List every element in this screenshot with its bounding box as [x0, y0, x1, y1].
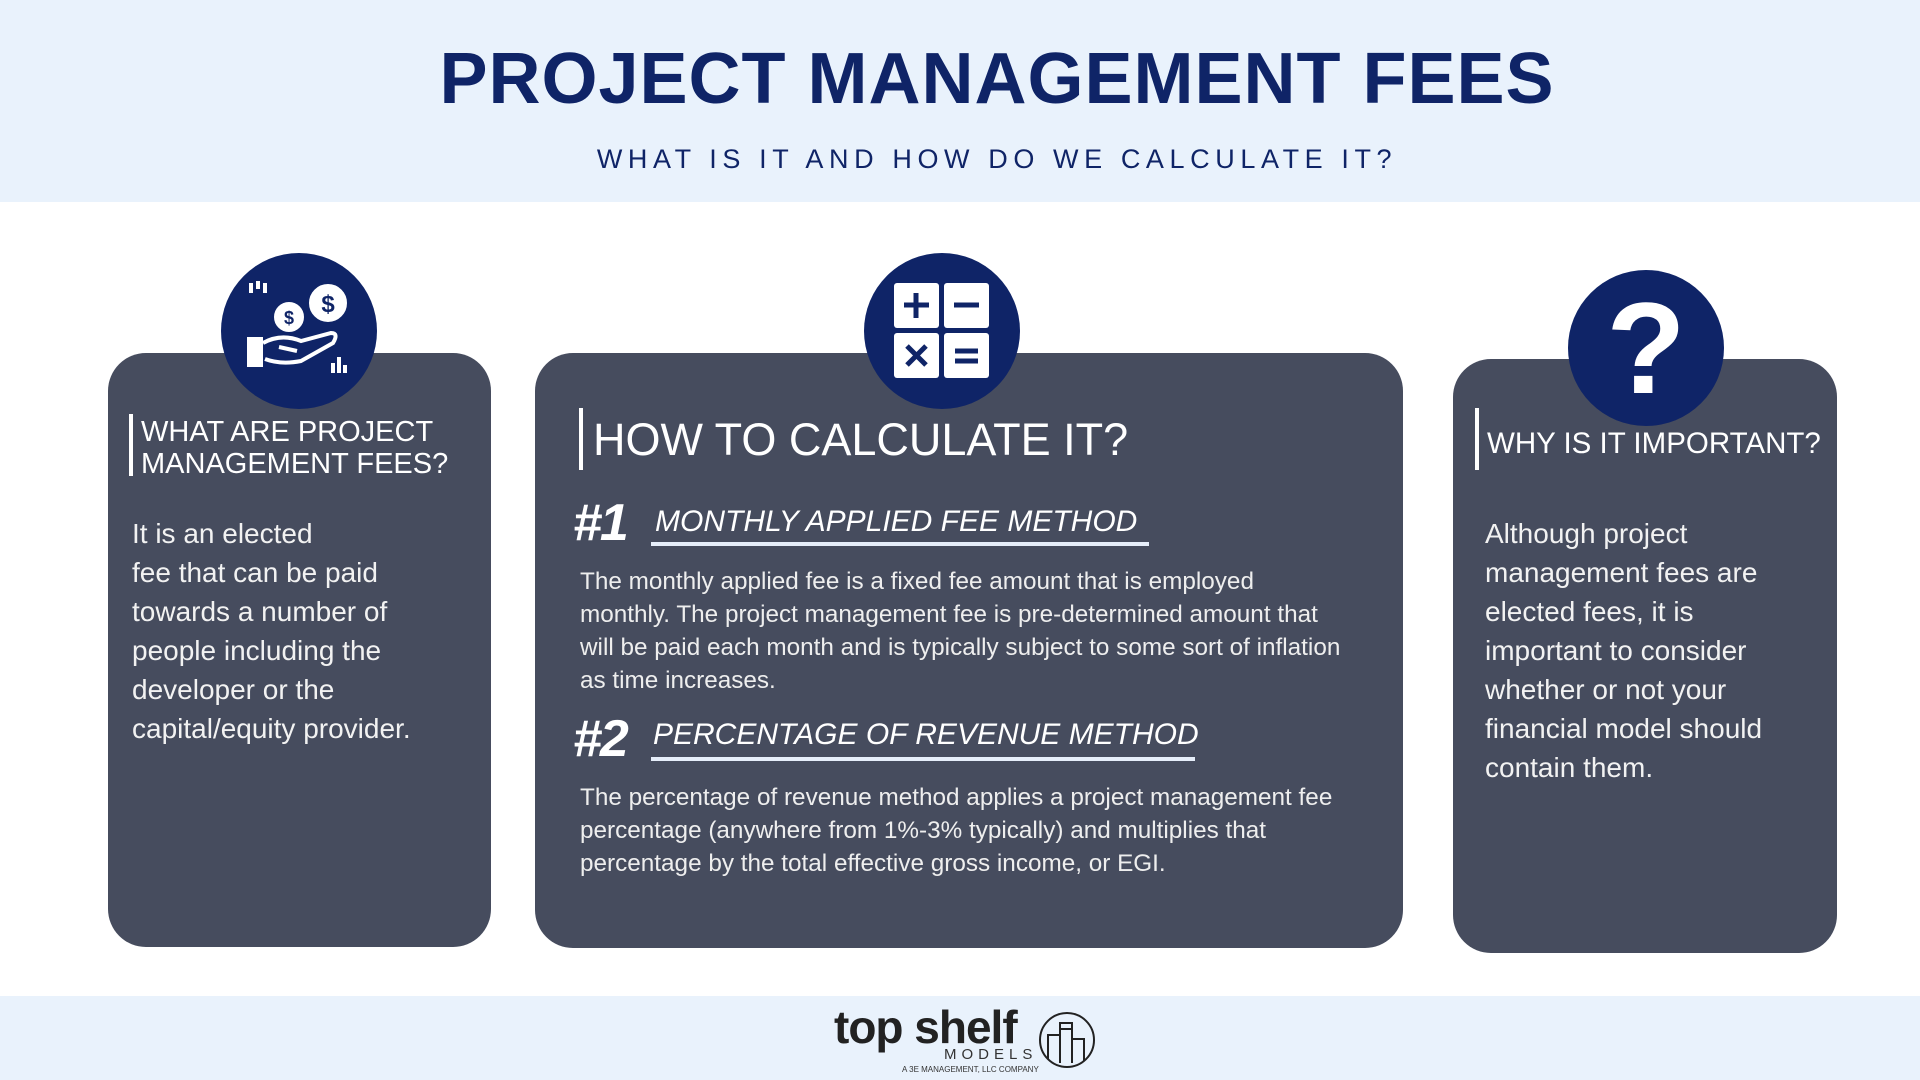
body text: developer or the [132, 674, 334, 705]
method 2 [573, 710, 1332, 877]
icon: calculator [864, 253, 1020, 409]
icon: question mark [1568, 270, 1724, 426]
method 1: as time increases. [580, 667, 776, 694]
subtitle: WHAT IS IT AND HOW DO WE CALCULATE IT? [597, 144, 1397, 174]
heading [1475, 408, 1821, 470]
panel: what are fees [108, 353, 491, 947]
panel: why important [1453, 359, 1837, 953]
heading: HOW TO CALCULATE IT? [593, 414, 1128, 465]
method 1: monthly. The project management fee is pre-determined amount that [580, 601, 1318, 628]
method 2: #2 [573, 710, 627, 768]
heading: WHAT ARE PROJECT [141, 416, 433, 448]
logo [834, 1001, 1095, 1074]
footer band [0, 996, 1920, 1080]
method 1: MONTHLY APPLIED FEE METHOD [655, 505, 1137, 538]
method 2: The percentage of revenue method applies a project management fee [580, 784, 1332, 811]
body text: management fees are [1485, 557, 1757, 588]
body text: whether or not your [1485, 674, 1726, 705]
body text [1485, 518, 1762, 783]
body text: fee that can be paid [132, 557, 378, 588]
icon: money hand: $ [284, 308, 294, 328]
body text: towards a number of [132, 596, 387, 627]
icon: question mark: ? [1606, 275, 1686, 421]
panel: how to calculate [535, 353, 1403, 948]
method 1: The monthly applied fee is a fixed fee amount that is employed [580, 568, 1254, 595]
method 2: PERCENTAGE OF REVENUE METHOD [653, 718, 1199, 751]
header band [0, 0, 1920, 202]
heading: WHY IS IT IMPORTANT? [1487, 427, 1821, 460]
body text: capital/equity provider. [132, 713, 411, 744]
logo: A 3E MANAGEMENT, LLC COMPANY [902, 1065, 1039, 1074]
body text: financial model should [1485, 713, 1762, 744]
body text: people including the [132, 635, 381, 666]
logo: top shelf [834, 1001, 1017, 1053]
method 1: #1 [573, 494, 627, 552]
heading: MANAGEMENT FEES? [141, 448, 448, 480]
icon: money hand [221, 253, 377, 409]
body text: It is an elected [132, 518, 313, 549]
title: PROJECT MANAGEMENT FEES [439, 39, 1555, 119]
method 2: percentage (anywhere from 1%-3% typically) and multiplies that [580, 817, 1266, 844]
body text: important to consider [1485, 635, 1746, 666]
logo: MODELS [944, 1046, 1037, 1063]
body text: Although project [1485, 518, 1687, 549]
body text: contain them. [1485, 752, 1653, 783]
method 1 [573, 494, 1340, 694]
body text [132, 518, 411, 744]
method 1: will be paid each month and is typically subject to some sort of inflation [580, 634, 1340, 661]
method 2: percentage by the total effective gross income, or EGI. [580, 850, 1166, 877]
heading [129, 414, 448, 480]
body text: elected fees, it is [1485, 596, 1694, 627]
icon: money hand: $ [321, 291, 335, 318]
